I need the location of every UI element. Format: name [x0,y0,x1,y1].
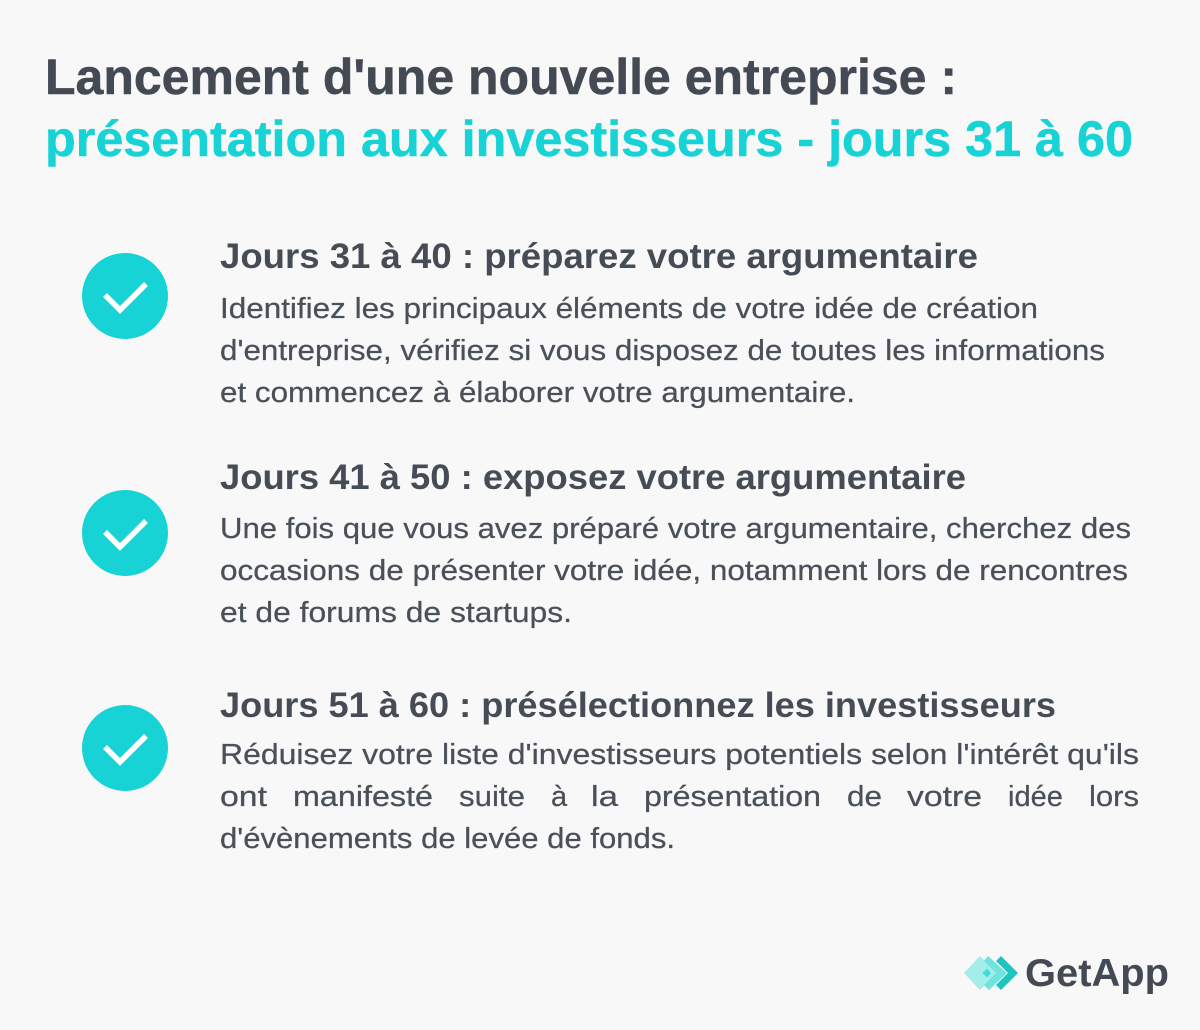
text block: jours 51 à 60: idée [1008,781,1063,813]
text block: jours 51 à 60: d'évènements de levée de fonds. [220,823,675,855]
icon: check 3 [82,705,168,791]
panel: jours 41 à 50 [82,458,1131,629]
text block: jours 31 à 40: Identifiez les principaux éléments de votre idée de création [220,293,1038,325]
text block: jours 51 à 60: votre [907,781,982,813]
text block: jours 51 à 60: présentation [644,781,821,813]
text block: jours 41 à 50 [220,513,1131,629]
title [45,49,1133,167]
text block: jours 31 à 40: et commencez à élaborer votre argumentaire. [220,377,855,409]
text block: jours 51 à 60: à [551,781,568,813]
panel: jours 51 à 60 [82,686,1139,855]
heading: jours 41 à 50: Jours 41 à 50 : exposez votre argumentaire [220,458,966,497]
icon: check 2 [82,490,168,576]
text block: jours 51 à 60: la [591,781,619,813]
text block: jours 51 à 60: ont [220,781,267,813]
logo: GetApp [964,952,1169,995]
wordmark: GetApp [1025,952,1169,995]
text block: jours 31 à 40: d'entreprise, vérifiez si vous disposez de toutes les informations [220,335,1105,367]
text block: jours 41 à 50: occasions de présenter votre idée, notamment lors de rencontres [220,555,1128,587]
text block: jours 31 à 40 [220,293,1105,409]
text block: jours 51 à 60: manifesté [293,781,433,813]
heading: jours 31 à 40: Jours 31 à 40 : préparez votre argumentaire [220,237,978,276]
text block: jours 51 à 60 [220,739,1139,855]
heading: jours 51 à 60: Jours 51 à 60 : présélectionnez les investisseurs [220,686,1056,725]
title: présentation aux investisseurs - jours 31 à 60 [45,111,1133,167]
text block: jours 51 à 60: lors [1089,781,1139,813]
text block: jours 41 à 50: et de forums de startups. [220,597,572,629]
text block: jours 51 à 60: de [847,781,882,813]
text block: jours 51 à 60: Réduisez votre liste d'investisseurs potentiels selon l'intérêt qu'ils [220,739,1139,771]
icon: check 1 [82,253,168,339]
icon: GetApp diamonds [964,956,1018,990]
text block: jours 41 à 50: Une fois que vous avez préparé votre argumentaire, cherchez des [220,513,1131,545]
text block: jours 51 à 60: suite [459,781,525,813]
panel: jours 31 à 40 [82,237,1105,409]
title: Lancement d'une nouvelle entreprise : [45,49,957,105]
